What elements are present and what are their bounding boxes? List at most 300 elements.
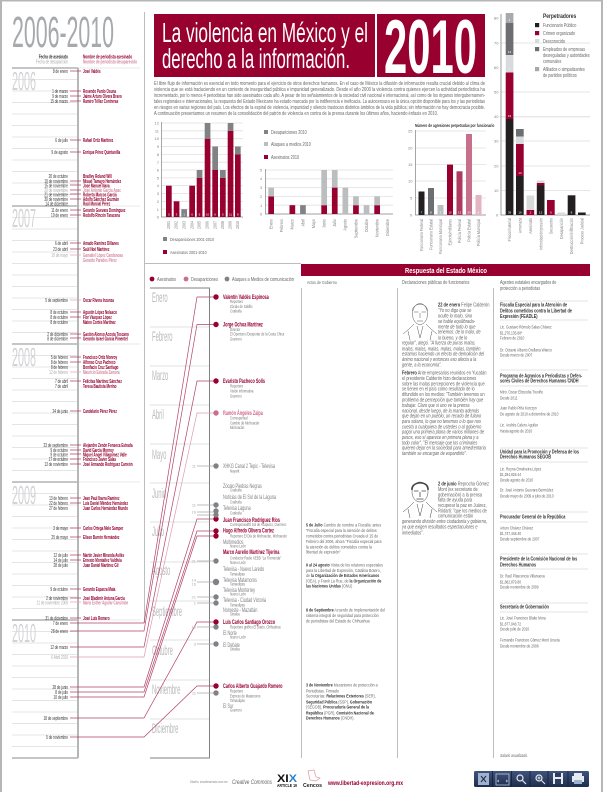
- journalist names: José Armando Rodríguez Carreón: [83, 461, 133, 467]
- month labels: Enero: [152, 290, 168, 306]
- journalist names: Eliseo Barrón Hernández: [83, 534, 120, 540]
- journalist names: Bonifacio Cruz Santiago: [83, 364, 119, 370]
- event details: Reportero gráfico El Diario, Chihuahua: [230, 625, 281, 630]
- legend: perpetradores: Funcionario Público: [543, 22, 577, 28]
- chart: agresiones perpetradas por funcionario: 0: [410, 212, 413, 218]
- panel: declaraciones públicas: Febrero Ante empresarios reunidos en Yucatán: [402, 370, 487, 376]
- chart: tipo de agresión por perpetrador: 13: [508, 50, 511, 54]
- icon: print: [572, 773, 584, 784]
- chart: desapariciones y asesinatos 2001-2010: 3: [176, 212, 178, 216]
- dates: 8 de julio: [55, 689, 68, 695]
- panel: declaraciones públicas: trabajar. Claro que si uno ve la prensa: [402, 403, 470, 408]
- legend: perpetradores: Crimen organizado: [543, 30, 576, 36]
- month labels: Diciembre: [152, 721, 178, 737]
- event names: Hugo Alfredo Olivera Cortez: [223, 528, 274, 535]
- attack count labels: 16: [192, 510, 197, 514]
- agency officials: De agosto de 2010 a diciembre de 2010: [500, 411, 559, 417]
- section header: Respuesta del Estado México: [301, 264, 590, 276]
- journalist names: Mauricio Estrada Zamora: [83, 369, 120, 375]
- logo: Cencos: Cencos: [303, 783, 322, 789]
- dates: 9 de octubre: [50, 586, 68, 592]
- chart: tipo de agresión por perpetrador: Desaparición: [558, 218, 564, 239]
- website url: www.libertad-expresion.org.mx: [327, 780, 403, 787]
- journalist names: Agustín López Nolasco: [83, 309, 117, 315]
- dates: 15 de marzo: [50, 98, 68, 104]
- chart: agresiones por mes 2010: 0: [260, 212, 263, 216]
- panel: actos de gobierno: las Naciones Unidas (ONU): [306, 583, 353, 589]
- chart: agresiones por mes 2010: Marzo: [289, 219, 295, 229]
- event dots: [213, 294, 219, 689]
- chart: tipo de agresión por perpetrador: 12: [539, 210, 543, 214]
- chart: tipo de agresión por perpetrador: 20: [494, 164, 499, 168]
- logo: Article 19: ARTICLE 19: [277, 783, 298, 788]
- frame lines between timeline and main area: [144, 12, 301, 623]
- journalist names: Gerardo Paredes Pérez: [83, 257, 117, 263]
- chart: agresiones por mes 2010: Junio: [321, 219, 327, 228]
- year banner 2010: [377, 5, 485, 90]
- event details: Michoacán: [230, 426, 244, 430]
- footer credits: Diseño: sinoidesenado.com.mx: [190, 779, 228, 784]
- chart: agresiones por mes 2010: 3: [260, 185, 263, 190]
- attack count labels: 16: [192, 582, 197, 586]
- journalist names: José Valdés: [83, 68, 101, 74]
- event details: Reportero: [230, 384, 243, 389]
- journalist names: Bradley Roland Will: [83, 173, 112, 179]
- panel: agentes estatales: [500, 301, 588, 758]
- dates: 14 de julio: [54, 557, 68, 563]
- month labels: Febrero: [152, 329, 173, 345]
- dates: 8 de febrero: [51, 364, 68, 370]
- legend chart 2: [264, 129, 311, 160]
- agency headings: Delitos cometidos contra la Libertad de: [500, 308, 572, 314]
- event details: Guerrero: [230, 708, 242, 713]
- panel: declaraciones públicas: estamos haciendo un efecto de demolición del: [402, 351, 485, 357]
- chart: agresiones perpetradas por funcionario: 15: [448, 210, 452, 214]
- chart: agresiones por mes 2010: Agosto: [342, 219, 348, 231]
- intro text: incrementado, por lo menos 4 periodistas han sido asesinados cada año. A pesar de los señalamientos de la sociedad civil nacional e internacional, así como de los órganos intergubernamen-: [154, 93, 485, 99]
- dates: 23 de abril: [53, 246, 68, 252]
- agency officials: Desde noviembre de 2009: [500, 584, 539, 590]
- dates: 12 de febrero: [49, 369, 68, 375]
- chart: tipo de agresión por perpetrador: 30: [494, 138, 499, 144]
- panel: actos de gobierno: Periodistas. Firmado: [306, 688, 339, 694]
- chart: desapariciones y asesinatos 2001-2010: 11: [155, 128, 160, 134]
- panel: declaraciones públicas: Mont (ex secretario de: [438, 487, 478, 492]
- panel: left timeline 2006-2010: 2006-2010: [12, 8, 114, 57]
- panel: actos de gobierno: (OEA), y Frank La Rue, de la Organización de: [306, 578, 382, 584]
- agency officials: $1,877,048.72: [500, 621, 522, 627]
- event details: Tamaulipas: [230, 582, 245, 587]
- chart: agresiones perpetradas por funcionario: 25: [408, 128, 413, 134]
- chart: tipo de agresión por perpetrador: Amenaza: [517, 218, 523, 233]
- event names: Jorge Ochoa Martínez: [223, 322, 263, 329]
- chart: agresiones perpetradas por funcionario: Funcionario Federal: [418, 219, 424, 251]
- journalist names: José Manuel Nava: [83, 182, 110, 189]
- panel: actos de gobierno: libertad de expresión": [306, 549, 341, 555]
- attack count labels: 31: [192, 558, 197, 564]
- journalist names: Rafael Ortiz Martínez: [83, 137, 114, 143]
- dates: 2 de diciembre: [47, 331, 68, 337]
- month labels: Marzo: [152, 368, 168, 384]
- event details: Director: [230, 328, 241, 332]
- dates: 10 de noviembre: [44, 178, 68, 184]
- timeline axis: [77, 68, 79, 758]
- chart: tipo de agresión por perpetrador: 0: [496, 212, 499, 218]
- dates: 1 de marzo: [52, 88, 68, 94]
- event names: Juan Francisco Rodríguez Ríos: [223, 517, 280, 525]
- journalist names: Rosendo Pardo Osuna: [83, 88, 116, 94]
- event names: El Norte: [223, 630, 237, 638]
- chart: desapariciones y asesinatos 2001-2010: 2003: [181, 221, 186, 229]
- panel: left timeline 2006-2010: [12, 8, 140, 758]
- footer credits: Creative Commons: [232, 779, 273, 786]
- dates: 13 de noviembre: [44, 461, 68, 467]
- dates: 6 de abril: [55, 240, 68, 246]
- panel: declaraciones públicas: pesos, eso sí aparece en primera plana y a: [401, 435, 479, 440]
- chart: desapariciones y asesinatos 2001-2010: 2007: [212, 221, 217, 229]
- event details: Guerrero: [230, 337, 242, 342]
- chart: desapariciones y asesinatos 2001-2010: 5: [222, 212, 224, 216]
- event details: Reportero El Día de Michoacán, Michoacán: [230, 534, 287, 539]
- legend: perpetradores: desreguladas y autoridades: [543, 52, 590, 58]
- chart: agresiones perpetradas por funcionario: 6: [478, 210, 480, 214]
- journalist names: Gerardo Guevara Domínguez: [83, 207, 126, 213]
- agency headings: Procurador General de la República: [500, 514, 566, 520]
- chart: agresiones perpetradas por funcionario: Número de agresiones perpetradas por funcionario: [415, 122, 495, 128]
- logo: Article 19: XIX: [277, 773, 298, 785]
- panel: declaraciones públicas: quieren dejar en la sociedad para amedrentaria: [402, 445, 486, 451]
- chart: agresiones por mes 2010: Julio: [332, 219, 337, 227]
- panel: declaraciones públicas: para sotano, lo que no tenemos o lo que nos: [401, 419, 482, 424]
- intro text: El libre flujo de información es esencial en todo momento para el ejercicio de otros derechos humanos. En el caso de México la difusión de información resulta crucial debido al clima de: [154, 81, 485, 87]
- dates: 13 de febrero: [49, 495, 68, 501]
- panel: declaraciones públicas: tenemos: de lo malo, de: [438, 329, 481, 335]
- panel: declaraciones públicas: gente, a la economía".: [402, 362, 442, 368]
- agency officials: Dr. Raúl Plascencia Villanueva: [500, 573, 545, 579]
- agency officials: Desde marzo de 2007: [500, 352, 533, 358]
- icon: page width: [496, 774, 509, 785]
- chart: agresiones perpetradas por funcionario: 10: [408, 178, 413, 184]
- chart: agresiones perpetradas por funcionario: 8: [430, 210, 432, 214]
- chart: desapariciones y asesinatos 2001-2010: 6: [191, 212, 193, 216]
- event names: Ramón Ángeles Zalpa: [223, 409, 264, 418]
- month labels: Agosto: [152, 563, 170, 579]
- chart: agresiones perpetradas por funcionario: Policía Municipal: [475, 219, 481, 246]
- chart: tipo de agresión por perpetrador: 7: [509, 67, 511, 71]
- chart: desapariciones y asesinatos 2001-2010: 8: [237, 212, 239, 216]
- chart: desapariciones y asesinatos 2001-2010: 7: [157, 160, 160, 165]
- attack count labels: 1: [194, 600, 197, 606]
- agency headings: Derechos Humanos: [500, 562, 537, 568]
- journalist names: Francisco Ortiz Monroy: [83, 354, 118, 360]
- event names: Noroeste - Mazatlán: [223, 607, 257, 615]
- panel: actos de gobierno: República (PGR), Comisión Nacional de: [306, 710, 374, 716]
- chart: agresiones por mes 2010: 5: [260, 168, 263, 172]
- event details: Sinaloa: [230, 612, 240, 617]
- chart: agresiones por mes 2010: Diciembre: [384, 219, 390, 236]
- dates: 5 de febrero: [51, 354, 68, 360]
- chart: agresiones perpetradas por funcionario: 20: [408, 146, 413, 150]
- panel: declaraciones públicas: todo color". "El mensaje que los criminales: [402, 440, 478, 446]
- dates: 8 de octubre: [50, 319, 68, 325]
- icon: zoom out: [517, 775, 526, 784]
- icon: portrait Felipe Calderón: [403, 304, 437, 340]
- journalist names: José Antonio García Apac: [83, 187, 121, 193]
- chart: tipo de agresión por perpetrador: [494, 13, 590, 254]
- chart: tipo de agresión por perpetrador: Secuestro: [548, 218, 554, 234]
- event details: Coahuila: [230, 309, 242, 314]
- event details: Nayarit: [230, 469, 239, 474]
- agency officials: Dr. José Antonio Guevara Bermúdez: [500, 487, 553, 493]
- agency officials: $1,294,828.44: [500, 471, 522, 477]
- legend: perpetradores: Perpetradores: [543, 14, 576, 20]
- panel: declaraciones públicas: lo bueno, y de lo: [438, 335, 468, 341]
- journalist names: Miguel Ángel Villagómez Valle: [83, 450, 127, 458]
- panel: declaraciones públicas: generando división entre ciudadanía y gobierno,: [402, 519, 487, 524]
- chart: agresiones perpetradas por funcionario: Funcionario Estatal: [428, 219, 434, 250]
- journalist names: Jean Paul Ibarra Ramírez: [83, 495, 120, 501]
- legend chart 2: Desapariciones 2010: [271, 129, 307, 135]
- legend chart 2: Asesinatos 2010: [271, 154, 300, 160]
- event names: Evaristo Pacheco Solís: [223, 378, 265, 386]
- event names: Luis Carlos Santiago Orozco: [223, 619, 276, 627]
- journalist names: Ernesto Montañez Valdivia: [83, 557, 122, 563]
- chart: desapariciones y asesinatos 2001-2010: 6: [157, 168, 160, 172]
- month labels: Abril: [152, 407, 164, 423]
- intro text: tales regionales e internacionales, la respuesta del Estado Mexicano ha estado marcada por la indiferencia e ineficacia. La autocensura es la única opción disponible para los y las periodistas: [154, 99, 485, 105]
- event details: Nuevo León: [230, 561, 246, 565]
- panel: declaraciones públicas: mente de todo lo que: [438, 324, 476, 330]
- journalist names: Jaime Arturo Olvera Bravo: [83, 93, 122, 99]
- journalist names: Saúl Noé Martínez: [83, 246, 110, 252]
- journalist names: Mateo Cortés Martínez: [83, 319, 116, 325]
- column headings: Actos de Gobierno: [307, 279, 337, 285]
- chart: desapariciones y asesinatos 2001-2010: 2009: [227, 221, 233, 229]
- journalist names: Martín Javier Miranda Avilés: [83, 552, 125, 558]
- panel: actos de gobierno: "Fiscalía especial para la atención de delitos: [306, 528, 377, 533]
- panel: declaraciones públicas: también se encargan de expandirlo".: [402, 451, 467, 456]
- panel: declaraciones públicas: regular", alegó. "A fuerza de puras malas,: [402, 340, 476, 346]
- panel: actos de gobierno: 3 de Noviembre Mecanismo de protección a: [306, 682, 378, 688]
- chart: tipo de agresión por perpetrador: Intimidación/presión: [538, 218, 543, 250]
- panel: declaraciones públicas: ánimo nacional y entonces eso afecta a la: [402, 357, 477, 362]
- panel: left timeline 2006-2010: 2007: [12, 203, 36, 233]
- dates: 21 de noviembre: [44, 191, 68, 198]
- dates: 9 de marzo: [52, 93, 68, 99]
- journalist names: Adolfo Sánchez Guzmán: [83, 196, 119, 202]
- panel: 2010 month axis: [70, 288, 287, 758]
- column headings: [307, 279, 557, 291]
- chart: desapariciones y asesinatos 2001-2010: 1: [183, 212, 185, 216]
- chart: agresiones perpetradas por funcionario: Policía Estatal: [466, 219, 472, 242]
- panel: actos de gobierno: 8 de Septiembre Acuerdo de Implementación del: [306, 607, 385, 613]
- chart: desapariciones y asesinatos 2001-2010: 11: [229, 212, 232, 216]
- toolbar: [474, 771, 589, 787]
- event details: Coahuila: [230, 488, 242, 493]
- chart: desapariciones y asesinatos 2001-2010: 2006: [204, 221, 210, 229]
- journalist names: Amado Ramírez Dillanes: [83, 240, 119, 246]
- legend: tipos de agresión: [150, 277, 294, 283]
- column headings: Declaraciones públicas de funcionarios: [402, 280, 470, 285]
- panel: declaraciones públicas: problema de percepción que también hay que: [401, 397, 484, 403]
- chart: desapariciones y asesinatos 2001-2010: 2010: [234, 221, 240, 229]
- event details: Reportero: [230, 689, 243, 694]
- chart: desapariciones y asesinatos 2001-2010: 8: [157, 152, 160, 157]
- chart: agresiones perpetradas por funcionario: Funcionario Municipal: [437, 219, 443, 254]
- chart: agresiones perpetradas por funcionario: 5: [410, 196, 413, 200]
- chart: agresiones perpetradas por funcionario: [408, 122, 495, 254]
- journalist names: Flor Vásquez López: [83, 314, 112, 320]
- panel: declaraciones públicas: que dejan en un pueblo, un recado de fulano: [402, 413, 482, 419]
- logo: Cencos: [303, 770, 322, 789]
- chart: desapariciones y asesinatos 2001-2010: [155, 120, 243, 255]
- legend: perpetradores: Desconocido: [543, 38, 565, 44]
- dates: 8 de febrero: [51, 359, 68, 365]
- legend: perpetradores: de partidos políticos: [543, 72, 577, 78]
- panel: declaraciones públicas: falta de ayuda para: [438, 497, 473, 503]
- panel: declaraciones públicas: difundido en los medios: "También tenemos un: [402, 392, 485, 397]
- chart: desapariciones y asesinatos 2001-2010: 2008: [219, 221, 225, 229]
- dates: 22 de febrero: [49, 500, 68, 506]
- agency headings: Fiscalía Especial para la Atención de: [500, 302, 568, 308]
- chart: tipo de agresión por perpetrador: 16: [518, 210, 522, 214]
- chart: tipo de agresión por perpetrador: 19: [508, 114, 511, 118]
- journalist names: Carlos Ortega Melo Samper: [83, 525, 123, 531]
- dates: 3 de mayo: [53, 525, 68, 531]
- panel: declaraciones públicas: nacional, desde luego, de la manta además: [402, 408, 480, 414]
- title banner: derecho a la información.: [162, 43, 350, 74]
- chart: tipo de agresión por perpetrador: 10: [494, 188, 499, 193]
- chart: desapariciones y asesinatos 2001-2010: 5: [168, 212, 170, 216]
- dates: 6 de julio: [55, 137, 68, 143]
- intro text: en riesgos en varias regiones del país. Los efectos de la espiral de violencia, impunidad y silencio trastocan distintos ámbitos de la vida pública; sin información no hay democracia posible.: [154, 105, 485, 111]
- panel: declaraciones públicas: se hable equilibrada-: [438, 319, 475, 324]
- event details: Nuevo León: [230, 544, 246, 549]
- agency officials: [500, 324, 560, 758]
- chart: tipo de agresión por perpetrador: 70: [494, 40, 499, 46]
- event details: Cambio de Michoacán: [230, 421, 259, 426]
- event names: Televisa - Ciudad Victoria: [223, 597, 266, 605]
- panel: actos de gobierno: la atención de delitos cometidos contra la: [306, 544, 372, 550]
- journalist names: Francisco Javier Salas: [83, 456, 116, 462]
- attack count labels: [192, 464, 197, 696]
- event names: Multimedios: [223, 539, 244, 547]
- agency officials: Dr. Octavio Alberto Orellana Wiarco: [500, 347, 552, 353]
- dates: 8 de octubre: [50, 314, 68, 320]
- chart: tipo de agresión por perpetrador: 60: [494, 65, 499, 70]
- panel: declaraciones públicas: malas, malas, malas, malas, malas, también: [402, 346, 481, 352]
- panel: actos de gobierno: Seguridad Pública (SSP), Gobernación: [306, 699, 372, 705]
- agency officials: Arturo Chávez Chávez: [500, 525, 533, 531]
- intro text: [154, 81, 485, 117]
- journalist names: Gastón Alonso Acosta Toscano: [83, 331, 129, 337]
- chart: agresiones por mes 2010: Mayo: [310, 219, 316, 228]
- panel: actos de gobierno: Derechos Humanos (CNDH).: [306, 715, 354, 721]
- dates: 18 de septiembre: [43, 715, 68, 721]
- chart: tipo de agresión por perpetrador: 39: [508, 210, 511, 214]
- connector lines from 2010 dates to events: [70, 297, 216, 737]
- chart: tipo de agresión por perpetrador: 2: [530, 210, 532, 214]
- event details: Tamaulipas: [230, 603, 245, 608]
- legend: perpetradores: Empleados de empresas: [543, 46, 586, 52]
- chart: desapariciones y asesinatos 2001-2010: 10: [206, 212, 209, 216]
- chart: agresiones por mes 2010: 1: [260, 203, 263, 208]
- chart: tipo de agresión por perpetrador: 6: [550, 210, 552, 214]
- month labels: Octubre: [152, 643, 173, 659]
- section header: Respuesta del Estado México: Respuesta del Estado México: [405, 268, 487, 275]
- journalist names: Felícitas Martínez Sánchez: [83, 378, 122, 384]
- title banner: La violencia en México y el: [162, 17, 368, 48]
- dates: 9 de octubre: [50, 447, 68, 453]
- column headings: Nombre de periodista asesinado: [83, 53, 132, 60]
- dates: 7 de abril: [55, 378, 68, 384]
- agency officials: Fernando Francisco Gómez Mont Urueta: [500, 637, 560, 643]
- month labels: [152, 290, 182, 737]
- agency officials: Hasta agosto de 2010: [500, 428, 533, 434]
- dates: 9 de octubre: [50, 451, 68, 458]
- dates: 12 de julio: [54, 552, 68, 558]
- agency officials: Desde mayo de 2009 a julio de 2010: [500, 493, 554, 499]
- agency officials: Febrero de 2010: [500, 335, 525, 341]
- column headings: [36, 53, 137, 65]
- event details: Zócalo de Saltillo: [230, 305, 252, 309]
- chart: desapariciones y asesinatos 2001-2010: 2002: [173, 221, 179, 229]
- agency headings: Programa de Agravios a Periodistas y Defen-: [500, 373, 583, 379]
- agency officials: $1,270,135.88*: [500, 330, 523, 336]
- legend: tipos de agresión: Ataques a Medios de comunicación: [232, 277, 294, 283]
- agency officials: Juan Pablo Piña Kurczyn: [500, 405, 537, 411]
- legend: perpetradores: Afiliados o simpatizantes: [543, 66, 585, 72]
- icon: fit page: [478, 773, 489, 785]
- agency officials: Desde agosto de 2010: [500, 477, 534, 483]
- column headings: Fecha de asesinato: [39, 53, 68, 60]
- dates: 24 de junio: [52, 408, 68, 414]
- event details: Coahuila: [230, 511, 242, 516]
- agency headings: Derechos Humanos SEGOB: [500, 454, 552, 460]
- dates: 5 de noviembre: [46, 734, 68, 740]
- chart: agresiones perpetradas por funcionario: 24: [467, 210, 471, 214]
- agency officials: $1,747,448.40: [500, 530, 522, 536]
- attack count labels: 14: [192, 578, 197, 582]
- chart: tipo de agresión por perpetrador: 13: [518, 171, 522, 175]
- month labels: Mayo: [152, 447, 166, 463]
- legend: tipos de agresión: Desapariciones: [191, 277, 218, 283]
- attack count labels: 11: [192, 690, 197, 696]
- agency officials: Lic. José Francisco Blake Mora: [500, 615, 546, 621]
- agency headings: [500, 302, 583, 610]
- chart: tipo de agresión por perpetrador: Proceso Judicial: [579, 218, 585, 244]
- chart: desapariciones y asesinatos 2001-2010: 2: [157, 199, 160, 204]
- legend chart 1: Asesinatos 2001-2010: [170, 249, 207, 255]
- event names: Televisa Monterrey: [223, 587, 255, 595]
- legend chart 1: [163, 236, 214, 255]
- chart: desapariciones y asesinatos 2001-2010: 0: [157, 214, 160, 220]
- panel: actos de gobierno: para la Libertad de Expresión, Catalina Botero,: [306, 568, 381, 573]
- dates: 19 de enero: [51, 212, 68, 218]
- panel: left timeline 2006-2010: 2009: [12, 480, 36, 510]
- chart: desapariciones y asesinatos 2001-2010: 5: [157, 176, 160, 180]
- journalist names: Gerardo Esparza Mata: [83, 586, 116, 592]
- panel: declaraciones públicas: inmediatos".: [402, 530, 424, 536]
- journalist names: José Luis Romero: [83, 615, 110, 621]
- agency headings: Unidad para la Promoción y Defensa de los: [500, 449, 579, 455]
- agency officials: Desde 2011: [500, 395, 518, 401]
- chart: agresiones por mes 2010: Enero: [268, 219, 274, 229]
- event names: Televisa - Nuevo Laredo: [223, 566, 264, 574]
- chart: tipo de agresión por perpetrador: 50: [494, 90, 499, 94]
- icon: save: [553, 773, 563, 784]
- event details: [230, 300, 287, 713]
